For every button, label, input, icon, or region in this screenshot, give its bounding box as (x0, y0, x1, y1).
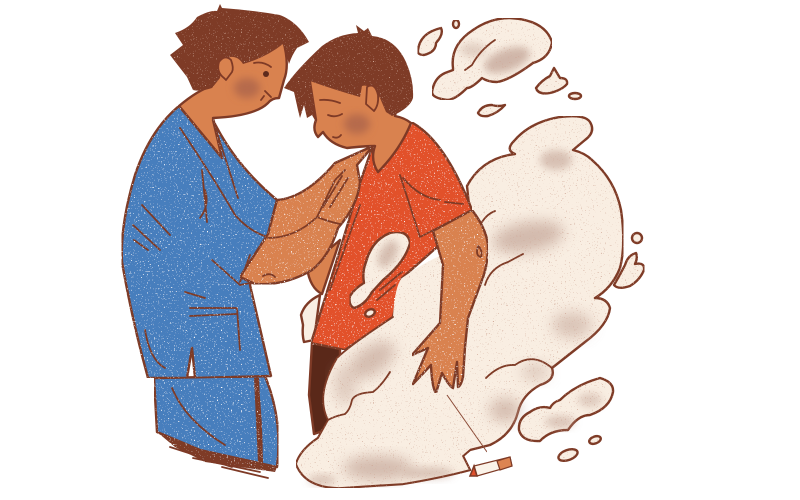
nurse arm and hands (240, 146, 373, 284)
nurse ear (218, 57, 233, 80)
nurse blue tunic (122, 106, 277, 378)
nurse skin and face (179, 40, 287, 158)
nurse hair (170, 4, 309, 91)
nurse lower arm behind patient (307, 240, 340, 294)
patient hair (284, 25, 413, 122)
back smoke cloud (296, 116, 623, 488)
patient red t-shirt (311, 122, 472, 350)
cigarette (470, 457, 512, 476)
patient face (306, 75, 411, 172)
small smoke puffs (418, 20, 644, 463)
patient ear (366, 86, 378, 111)
patient trousers (309, 343, 340, 434)
front smoke cloud (296, 255, 487, 488)
smoke puff on chest (350, 232, 410, 318)
small smoke behind hip (301, 295, 320, 342)
nurse trousers (154, 376, 278, 472)
patient arm and hand (412, 210, 488, 393)
top smoke cloud (432, 18, 552, 100)
ground scribble (170, 447, 268, 478)
